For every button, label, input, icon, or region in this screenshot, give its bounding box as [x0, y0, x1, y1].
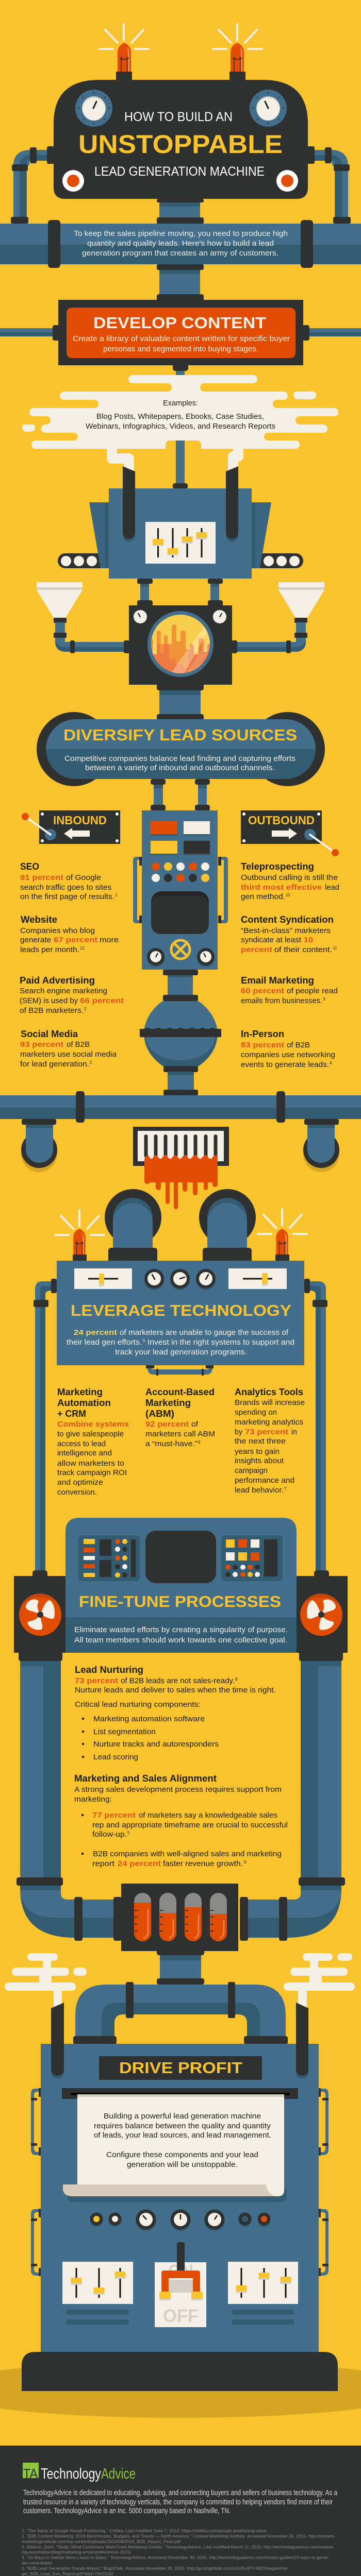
wheel valve: [171, 940, 190, 959]
title: LEAD GENERATION MACHINE: [94, 164, 265, 179]
column: analytics tools: insights about: [235, 1456, 284, 1465]
sign: outbound: OUTBOUND: [248, 814, 315, 827]
grate with orange liquid: [133, 1127, 229, 1209]
side pipes at Develop Content: [0, 325, 361, 341]
column: analytics tools: in: [291, 1428, 297, 1436]
examples text: Webinars, Infographics, Videos, and Research Reports: [86, 422, 275, 431]
column: analytics tools: 73 percent: [245, 1428, 288, 1436]
screen: [145, 1531, 216, 1583]
column: analytics tools: performance and: [235, 1476, 294, 1485]
pipe to arch: [160, 1955, 201, 1979]
pipes to control box: [151, 779, 210, 811]
paper sheet with conclusion: [63, 2094, 287, 2202]
outbound item: content syndication: 11: [333, 946, 337, 951]
fan box and big pipe: right: [296, 1570, 348, 1877]
footer panel: [0, 2446, 361, 2576]
title: UNSTOPPABLE: [78, 130, 283, 159]
bottom elbow: right: [240, 1877, 345, 1941]
logo: TechnologyAdvice: Advice: [101, 2466, 136, 2482]
bullet list: Nurture tracks and autoresponders: [93, 1740, 219, 1749]
tube meter box: [121, 1884, 238, 1955]
sign: outbound: [241, 810, 339, 856]
conclusion text: Building a powerful lead generation machine: [104, 2112, 261, 2121]
heading: leverage technology: LEVERAGE TECHNOLOGY: [71, 1301, 291, 1319]
inbound item: paid advertising: [20, 975, 124, 1015]
outbound item: teleprospecting: third most effective: [241, 883, 322, 892]
pressure bulb with pipes: [140, 970, 221, 1096]
furnace: [129, 605, 232, 690]
outbound item: in-person: In-Person: [241, 1028, 284, 1039]
funnel and pipe: left: [37, 582, 129, 653]
outbound item: teleprospecting: lead: [325, 883, 339, 892]
references: ate-more-leads/: [22, 2561, 53, 2566]
logo: TechnologyAdvice: TA: [23, 2466, 38, 2481]
small gauges: [147, 948, 215, 967]
bottom elbow: left: [17, 1877, 122, 1941]
references: 2. “B2B Content Marketing: 2016 Benchmarks, Budgets, and Trends — North America.” Content Marketing Institute. Accessed November 30, 2015. http://content-: [22, 2533, 335, 2538]
column: analytics tools: Analytics Tools: [235, 1386, 303, 1397]
examples text: Examples:: [163, 399, 198, 408]
inbound item: paid advertising: Paid Advertising: [20, 975, 95, 986]
slider panel: left: [62, 2262, 133, 2325]
examples text: Blog Posts, Whitepapers, Ebooks, Case Studies,: [96, 412, 264, 421]
inbound item: website: leads per month.: [20, 945, 79, 954]
on/off switch: [155, 2242, 206, 2327]
panel: leverage technology: [57, 1261, 304, 1365]
shadow under the machine base: [0, 2361, 361, 2418]
references: 4. “10 Ways to Deliver More Leads to Sales.” TechnologyAdvice. Accessed November 30, 2015. http://technologyadvice.com/vendor-guides/10-ways-to-gener-: [22, 2555, 330, 2560]
inbound item: SEO: [20, 861, 118, 901]
outbound item: in-person: companies use networking: [241, 1050, 335, 1059]
diversify text: between a variety of inbound and outbound channels.: [85, 764, 275, 772]
horizontal sliders: [74, 1268, 287, 1289]
panel: fine-tune processes: [65, 1518, 297, 1653]
inbound item: SEO: 91 percent: [20, 873, 63, 882]
column: analytics tools: by: [235, 1428, 242, 1436]
inbound item: paid advertising: (SEM) is used by: [20, 996, 78, 1005]
diversify text: Competitive companies balance lead finding and capturing efforts: [64, 754, 296, 763]
panel: develop content: [58, 300, 303, 365]
intro text: [74, 229, 288, 258]
text: lead nurturing: Lead Nurturing: [75, 1664, 143, 1675]
leverage text: track your lead generation programs.: [115, 1348, 247, 1357]
text: marketing and sales alignment: 24 percent: [118, 1859, 161, 1868]
column: account-based marketing: (ABM): [145, 1408, 174, 1419]
panel: drive profit machine: [41, 2003, 319, 2353]
fan box and big pipe: left: [14, 1570, 65, 1877]
column: account-based marketing: a “must-have.”: [145, 1439, 198, 1448]
arch pipe: [73, 1978, 288, 2044]
outbound item: in-person: events to generate leads.: [241, 1060, 329, 1069]
inbound item: website: 67 percent: [54, 936, 97, 944]
content machine: [89, 466, 271, 579]
outbound item: email marketing: of people read: [287, 987, 338, 995]
text: marketing and sales alignment: [74, 1773, 288, 1868]
on/off switch: OFF: [163, 2306, 199, 2326]
bullet list: Lead scoring: [93, 1753, 138, 1761]
center pipe to Develop Content: [157, 264, 204, 301]
conveyor: right: [252, 553, 303, 568]
conveyor: left: [58, 553, 109, 568]
horizontal distributor pipe: [0, 1091, 361, 1123]
steam: right: [284, 1953, 355, 2007]
inbound item: SEO: on the first page of results.: [20, 892, 114, 901]
cloud of steam with examples: [15, 375, 347, 451]
column: account-based marketing: 92 percent: [145, 1420, 189, 1429]
conclusion text: [94, 2112, 271, 2169]
intro text: generation program that creates an army of customers.: [82, 249, 278, 258]
pipe down to Diversify: [157, 690, 204, 720]
fine-tune text: Eliminate wasted efforts by creating a singularity of purpose.: [74, 1625, 288, 1634]
outbound item: in-person: 83 percent: [241, 1041, 284, 1049]
knob row: [90, 2209, 270, 2231]
inbound item: SEO: SEO: [20, 861, 39, 872]
red button: right: [276, 170, 298, 192]
big hood: right: [199, 1189, 256, 1261]
conclusion text: Configure these components and your lead: [106, 2150, 258, 2159]
text: marketing and sales alignment: follow-up.: [92, 1830, 127, 1839]
column: analytics tools: [235, 1386, 305, 1495]
text: lead nurturing: 8: [235, 1677, 238, 1682]
machine base: [22, 2352, 338, 2391]
text: marketing and sales alignment: 9: [244, 1860, 247, 1865]
small side pipes: [31, 2088, 329, 2276]
text: marketing and sales alignment: 5: [127, 1831, 130, 1835]
about text: customers. TechnologyAdvice is an Inc. 5000 company based in Nashville, TN.: [23, 2506, 231, 2515]
bullet list: Marketing automation software: [93, 1715, 205, 1723]
text: marketing and sales alignment: report: [92, 1859, 115, 1868]
inbound item: social media: for lead generation.: [20, 1060, 89, 1069]
tube 2: [159, 1893, 176, 1941]
references: 3. Watson, Zach. “Study: What Customers Want From Marketing Emails.” TechnologyAdvice. Last modified March 11, 2015. http://technologyadvice.com/market-: [22, 2544, 334, 2549]
label: drive profit: [99, 2056, 262, 2080]
inbound item: paid advertising: 66 percent: [80, 996, 124, 1005]
references: ing-automation/blog/marketing-email-preferences-2015/: [22, 2550, 132, 2555]
column: account-based marketing: of: [191, 1420, 199, 1429]
text: marketing and sales alignment: Marketing and Sales Alignment: [74, 1773, 217, 1784]
bullet list: List segmentation: [93, 1727, 156, 1736]
gauge: right: [250, 90, 287, 127]
outbound item: in-person: 4: [330, 1061, 332, 1065]
fine-tune text: [74, 1625, 288, 1645]
column: analytics tools: Brands will increase: [235, 1398, 305, 1407]
references: 1. “The Value of Google Result Positioning.” Chitika. Last modified June 7, 2013. https://chitika.com/google-positioning-value: [22, 2528, 267, 2533]
heading: diversify lead sources: DIVERSIFY LEAD SOURCES: [63, 726, 297, 744]
text: marketing and sales alignment: B2B companies with well-aligned sales and marketing: [93, 1850, 282, 1858]
text: lead nurturing: 73 percent: [75, 1676, 118, 1685]
porthole with fire: [147, 611, 214, 680]
outbound item: email marketing: [241, 975, 338, 1005]
inbound item: SEO: search traffic goes to sites: [20, 883, 111, 892]
text: marketing and sales alignment: marketing:: [74, 1795, 112, 1804]
intro text: quantity and quality leads. Here's how to build a lead: [87, 239, 274, 248]
title: HOW TO BUILD AN: [124, 110, 233, 124]
inbound item: website: generate: [20, 936, 51, 944]
drop pipe: right: [303, 1119, 339, 1172]
side pipe: left: [34, 1279, 57, 1572]
column: account-based marketing: marketers call ABM: [145, 1430, 215, 1438]
outbound item: teleprospecting: Outbound calling is still the: [241, 873, 338, 882]
column: marketing automation + CRM: + CRM: [57, 1408, 86, 1419]
smoke from stacks: [112, 446, 238, 471]
tube 1: [134, 1893, 151, 1941]
furnace gauges: [134, 610, 226, 623]
inbound item: social media: of B2B: [67, 1040, 90, 1049]
outbound item: content syndication: 10: [304, 936, 313, 944]
red button: left: [62, 170, 84, 192]
column: analytics tools: spending on: [235, 1408, 277, 1417]
outbound item: teleprospecting: 10: [286, 893, 290, 897]
center pipe below title machine: [157, 199, 204, 224]
develop content text: Create a library of valuable content written for specific buyer: [73, 334, 290, 343]
column: analytics tools: the next three: [235, 1437, 286, 1446]
on/off switch: ON: [168, 2261, 193, 2281]
drop pipe: left: [21, 1119, 57, 1172]
develop content text: [73, 334, 290, 353]
text: marketing and sales alignment: of marketers say a knowledgeable sales: [139, 1811, 277, 1820]
column: analytics tools: marketing analytics: [235, 1418, 303, 1427]
inbound item: social media: 2: [90, 1060, 92, 1065]
inbound item: social media: Social Media: [21, 1028, 78, 1039]
column: marketing automation + CRM: to give salespeople: [57, 1430, 124, 1438]
leverage text: 24 percent: [74, 1328, 117, 1337]
column: analytics tools: years to gain: [235, 1447, 280, 1456]
U-shaped connector: [146, 1365, 214, 1376]
paper slot: [62, 2088, 298, 2099]
control box: [142, 810, 218, 970]
pipe into content machine: [173, 440, 188, 489]
inbound item: paid advertising: of B2B marketers.: [20, 1006, 84, 1015]
warning light: leverage left: [55, 1210, 104, 1261]
title machine panel: [54, 80, 308, 199]
inbound item: website: Companies who blog: [20, 926, 95, 935]
inbound item: paid advertising: 2: [84, 1007, 87, 1011]
intro pipe with text: [0, 220, 361, 268]
colored tiles: [151, 821, 210, 855]
fine-tune text: All team members should work towards one collective goal.: [74, 1636, 287, 1645]
leverage text: Invest in the right systems to support and: [147, 1338, 294, 1347]
stacks: [123, 466, 238, 542]
outbound item: email marketing: 3: [323, 997, 325, 1002]
stacks: [51, 2003, 308, 2079]
column: analytics tools: campaign: [235, 1466, 268, 1475]
about text: [23, 2488, 338, 2515]
text: lead nurturing: of B2B leads are not sales-ready.: [121, 1676, 235, 1685]
funnel and pipe: right: [232, 582, 324, 653]
logo: TechnologyAdvice: [23, 2463, 136, 2482]
inbound item: social media: marketers use social media: [20, 1050, 117, 1059]
outbound item: teleprospecting: [241, 861, 339, 901]
outbound item: email marketing: Email Marketing: [241, 975, 314, 986]
conclusion text: of leads, your lead sources, and lead management.: [94, 2131, 271, 2140]
panel: diversify lead sources: [37, 712, 325, 786]
text: marketing and sales alignment: 77 percent: [92, 1811, 136, 1820]
pipes between machine and furnace: [137, 579, 223, 606]
column: marketing automation + CRM: intelligence and: [57, 1449, 112, 1458]
warning light: leverage right: [258, 1209, 307, 1261]
column: marketing automation + CRM: Combine systems: [57, 1420, 129, 1429]
control cluster: left: [78, 1535, 140, 1581]
column: marketing automation + CRM: Marketing: [57, 1386, 103, 1397]
outbound item: content syndication: percent: [241, 945, 272, 954]
column: marketing automation + CRM: track campaign ROI: [57, 1468, 127, 1477]
slider panel: right: [228, 2262, 298, 2325]
diversify text: [64, 754, 296, 772]
inbound item: website: Website: [21, 914, 57, 925]
conclusion text: generation will be unstoppable.: [127, 2160, 238, 2169]
column: analytics tools: 7: [284, 1486, 287, 1491]
references: [22, 2528, 335, 2576]
outbound item: email marketing: 60 percent: [241, 987, 284, 995]
column: marketing automation + CRM: allow marketers to: [57, 1459, 124, 1468]
logo: TechnologyAdvice: Technology: [41, 2466, 101, 2482]
screen: [151, 891, 209, 934]
gauge: left: [75, 90, 112, 127]
big hood: left: [105, 1189, 161, 1261]
column: account-based marketing: [145, 1386, 215, 1448]
column: account-based marketing: Account-Based: [145, 1386, 215, 1397]
title: [78, 110, 283, 179]
outbound item: in-person: [241, 1028, 335, 1069]
side pipe: right: [304, 1279, 327, 1572]
column: marketing automation + CRM: conversion.: [57, 1488, 97, 1497]
bullet list: [82, 1715, 219, 1761]
heading: develop content: DEVELOP CONTENT: [93, 314, 266, 332]
inbound item: social media: [20, 1028, 117, 1069]
outbound item: in-person: of B2B: [287, 1041, 310, 1049]
indicator dots: [152, 862, 209, 882]
control cluster: right: [221, 1535, 283, 1581]
text: marketing and sales alignment: rep and appropriate timeframe are crucial to successful: [92, 1821, 288, 1829]
column: account-based marketing: Marketing: [145, 1397, 191, 1408]
slider panel: [145, 522, 216, 564]
inbound item: website: [20, 914, 119, 954]
inbound item: website: more: [100, 936, 119, 944]
text: lead nurturing: Critical lead nurturing components:: [75, 1700, 201, 1709]
conclusion text: requires balance between the quality and quantity: [94, 2122, 271, 2130]
outbound item: teleprospecting: gen method.: [241, 892, 285, 901]
gauges: [144, 1269, 216, 1290]
references: marketinginstitute.com/wp-content/uploads/2015/09/2016_B2B_Report_Final.pdf: [22, 2539, 181, 2544]
side handles of control box: [133, 857, 228, 923]
intro text: To keep the sales pipeline moving, you need to produce high: [74, 229, 288, 238]
text: marketing and sales alignment: A strong sales development process requires support from: [74, 1785, 282, 1794]
outbound item: content syndication: of their content.: [274, 945, 332, 954]
outbound item: content syndication: “Best-in-class” marketers: [241, 926, 331, 935]
develop content text: personas and segmented into buying stages.: [103, 345, 258, 353]
top pipes: left elbow: [11, 146, 54, 224]
inbound item: social media: 93 percent: [20, 1040, 63, 1049]
column: marketing automation + CRM: Automation: [57, 1397, 111, 1408]
leverage text: of marketers are unable to gauge the success of: [120, 1328, 289, 1337]
label: drive profit: DRIVE PROFIT: [119, 2059, 242, 2077]
heading: fine-tune processes: FINE-TUNE PROCESSES: [79, 1592, 281, 1611]
text: lead nurturing: Nurture leads and deliver to sales when the time is right.: [75, 1686, 276, 1694]
leverage text: 5: [143, 1338, 145, 1343]
outbound item: content syndication: [241, 914, 337, 954]
steam: left: [5, 1953, 87, 2007]
column: marketing automation + CRM: [57, 1386, 129, 1497]
warning light: right with rays: [213, 24, 262, 80]
text: marketing and sales alignment: faster revenue growth.: [163, 1859, 243, 1868]
tube 3: [185, 1893, 202, 1941]
outbound item: email marketing: emails from businesses.: [241, 996, 322, 1005]
inbound item: SEO: 1: [115, 893, 118, 897]
small connector under develop content: [173, 363, 188, 376]
inbound item: paid advertising: Search engine marketing: [20, 987, 107, 995]
examples text: [86, 399, 275, 431]
sign: inbound: INBOUND: [53, 814, 107, 827]
column: marketing automation + CRM: access to lead: [57, 1439, 106, 1448]
leverage text: their lead gen efforts.: [67, 1338, 142, 1347]
outbound item: content syndication: syndicate at least: [241, 936, 302, 944]
orange drips: [144, 1155, 218, 1209]
column: analytics tools: lead behavior.: [235, 1486, 284, 1495]
tube 4: [210, 1893, 227, 1941]
inbound item: SEO: of Google: [66, 873, 101, 882]
sign: inbound: [22, 810, 120, 844]
top pipes: right elbow: [307, 146, 351, 224]
column: account-based marketing: 6: [198, 1440, 201, 1445]
leverage text: [67, 1328, 294, 1357]
outbound item: content syndication: Content Syndication: [241, 914, 334, 925]
references: 5. “B2B Lead Generation Trends Report.” BrightTalk. Accessed November 30, 2015. http://go.brighttalk.com/rs/105-RTY-982/images/Hol-: [22, 2566, 288, 2571]
column: marketing automation + CRM: and optimize: [57, 1478, 103, 1487]
warning light: left with rays: [100, 24, 149, 80]
outbound item: teleprospecting: Teleprospecting: [241, 861, 314, 872]
text: lead nurturing: [75, 1664, 276, 1761]
inbound item: website: 12: [80, 946, 85, 951]
